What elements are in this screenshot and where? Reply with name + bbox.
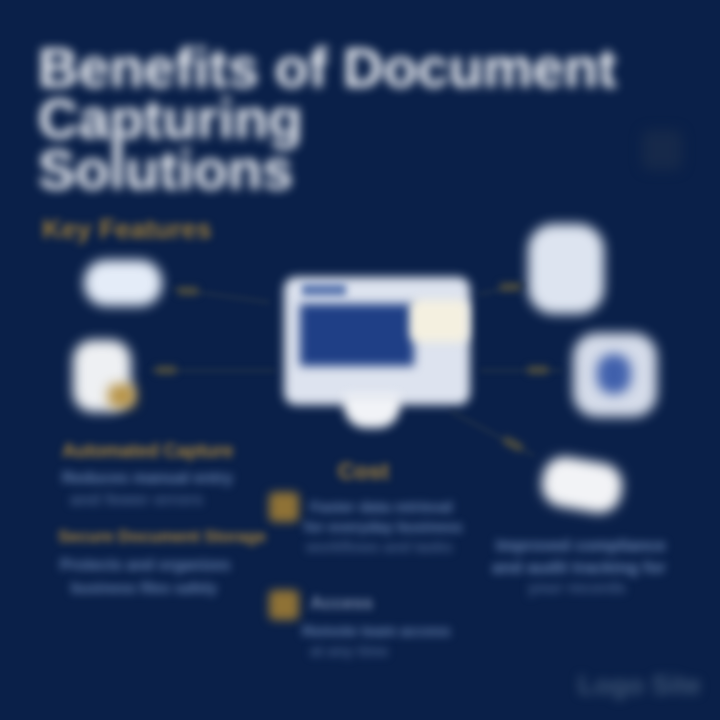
section heading: Key Features <box>42 214 212 244</box>
screen badge <box>410 300 468 342</box>
title <box>32 36 622 201</box>
bullet item one: for everyday business <box>304 519 462 536</box>
bullet text: Remote team access <box>302 623 450 640</box>
title: Solutions <box>38 138 293 201</box>
bullet icon <box>269 590 299 620</box>
text block: left feature two <box>54 526 270 598</box>
text block: left feature one: Reduces manual entry <box>62 470 233 487</box>
label: centre heading: Cost <box>338 458 389 484</box>
bullet text: Faster data retrieval <box>310 499 453 516</box>
text block: right caption: and audit tracking for <box>492 558 666 577</box>
monitor stand <box>344 394 400 428</box>
text block: right caption: Improved compliance <box>496 537 666 555</box>
bullet item two: at any time <box>310 643 388 660</box>
arrow: monitor to envelope <box>496 433 530 455</box>
arrow: monitor to shield <box>521 362 555 378</box>
arrow: cloud to monitor <box>174 283 205 299</box>
text block: right caption: your records <box>528 580 626 597</box>
text block: left feature two: Secure Document Storage <box>58 527 266 546</box>
bullet item two <box>262 583 453 660</box>
icon: small corner mark <box>642 130 682 170</box>
text block: left feature one <box>58 438 237 509</box>
icon: right top tablet <box>528 224 604 314</box>
icon: right envelope <box>538 453 626 517</box>
icon: right shield badge <box>563 323 667 427</box>
arrow: document to monitor <box>150 362 183 378</box>
bullet item one: workflows and tasks <box>306 539 453 556</box>
text block: left feature one: and fewer errors <box>70 490 203 509</box>
text block: right caption <box>489 536 668 597</box>
monitor frame <box>284 277 470 405</box>
monitor illustration <box>276 269 478 436</box>
text block: left feature one: Automated Capture <box>62 441 233 462</box>
arrow: monitor to tablet <box>493 279 526 296</box>
monitor screen <box>300 304 414 366</box>
text block: left feature two: Protects and organizes <box>60 557 231 574</box>
title: Capturing <box>38 87 302 150</box>
bullet heading: Access <box>310 593 373 613</box>
icon: document with badge <box>63 330 145 422</box>
text block: left feature two: business files safely <box>71 580 217 597</box>
icon: cloud <box>84 260 162 306</box>
monitor top bar <box>302 284 346 296</box>
footer logo text: Logo Site <box>578 670 701 700</box>
title: Benefits of Document <box>38 36 617 99</box>
bullet icon <box>269 492 299 522</box>
bullet item one <box>262 485 465 556</box>
